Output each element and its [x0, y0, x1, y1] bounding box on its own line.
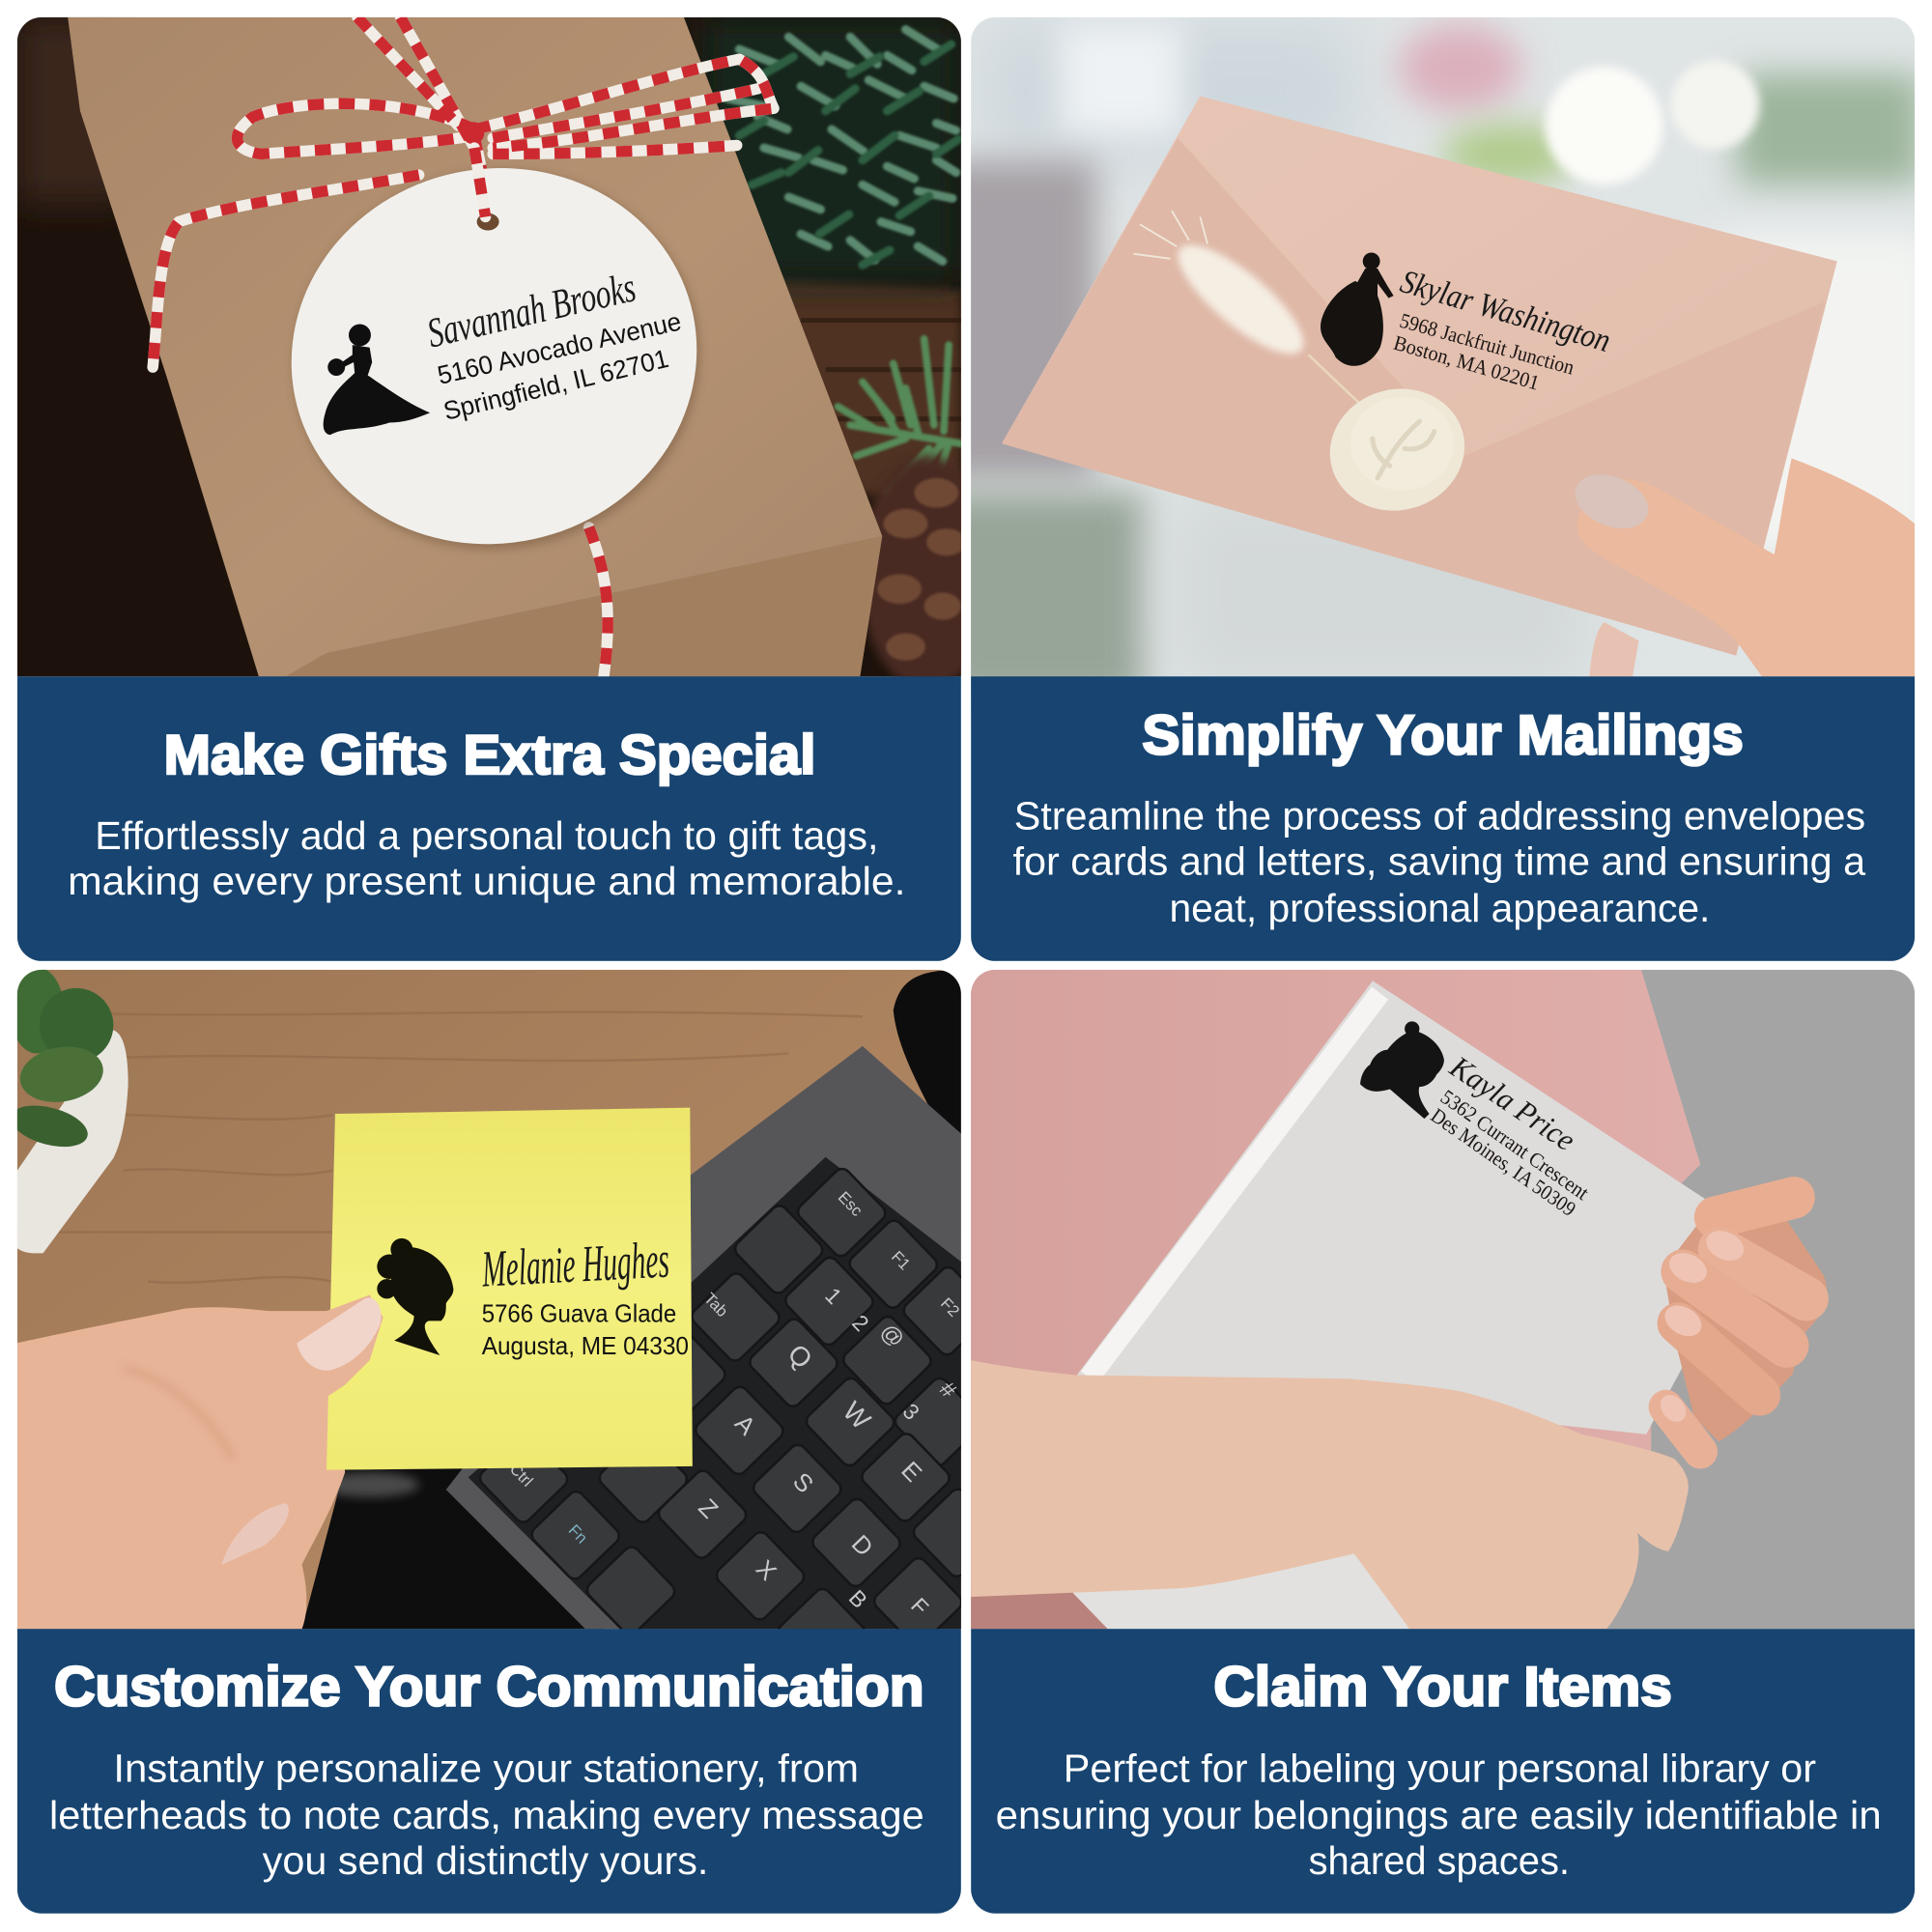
twine — [153, 17, 774, 676]
photo: wrapped gift with round tag — [17, 17, 993, 690]
keyboard keys — [476, 1165, 1005, 1680]
keyboard keys: Q — [782, 1338, 818, 1375]
body text: neat, professional appearance. — [1169, 886, 1710, 930]
body text — [49, 1746, 924, 1883]
icon: woman profile with flowing hair — [1360, 1021, 1444, 1119]
photo: pink envelope with wax seal — [936, 17, 1932, 702]
address text on book: Des Moines, IA 50309 — [1427, 1104, 1580, 1221]
keyboard keys: D — [846, 1530, 878, 1562]
panel: make gifts extra special — [17, 17, 993, 961]
keyboard keys: # — [935, 1377, 961, 1403]
arm and hand — [971, 1360, 1689, 1629]
laptop body — [446, 1046, 961, 1629]
photo: sticky note over laptop keyboard — [17, 970, 961, 1629]
address text on tag: 5160 Avocado Avenue — [435, 306, 684, 390]
body text: Streamline the process of addressing envelopes — [1014, 793, 1865, 838]
plant pot — [17, 1030, 128, 1253]
body text — [996, 1746, 1882, 1883]
address text on envelope: 5968 Jackfruit Junction — [1397, 309, 1577, 380]
address text on note — [480, 1231, 689, 1360]
keyboard keys: Ctrl — [506, 1460, 536, 1491]
keyboard keys: Z — [693, 1494, 723, 1523]
pinecone — [867, 449, 961, 680]
keyboard keys: @ — [876, 1319, 910, 1352]
keyboard keys: Esc — [835, 1188, 867, 1220]
address text on envelope: Skylar Washington — [1396, 263, 1615, 359]
address text on envelope — [1393, 272, 1609, 390]
fingers — [1665, 1198, 1806, 1452]
hand holding envelope — [1567, 458, 1915, 676]
heading: Make Gifts Extra Special — [164, 724, 815, 786]
thumb over note — [124, 1295, 384, 1565]
body text: for cards and letters, saving time and ensuring a — [1012, 839, 1865, 884]
round gift tag — [291, 142, 702, 553]
body text: you send distinctly yours. — [263, 1838, 708, 1883]
keyboard well — [469, 1157, 961, 1629]
black object corner — [894, 970, 961, 1133]
keyboard keys: 1 — [820, 1283, 847, 1309]
back of right hand — [1663, 1182, 1827, 1441]
kraft gift box — [68, 17, 882, 676]
caption background — [17, 676, 961, 961]
body text: letterheads to note cards, making every message — [49, 1793, 924, 1837]
caption background — [17, 1629, 961, 1914]
keyboard keys: F2 — [937, 1294, 963, 1321]
book spine highlight — [1090, 993, 1380, 1378]
panel: simplify your mailings — [936, 17, 1932, 961]
box lower fold — [286, 536, 882, 676]
keyboard keys: 2 — [847, 1310, 874, 1336]
keyboard keys: W — [838, 1396, 877, 1435]
yellow sticky note — [327, 1108, 693, 1470]
keyboard keys: S — [787, 1467, 818, 1498]
heading: Simplify Your Mailings — [1142, 705, 1744, 767]
address text on book — [1427, 1049, 1593, 1221]
panel: claim your items — [971, 970, 1915, 1914]
address text on note: Melanie Hughes — [480, 1231, 670, 1298]
wax seal — [1329, 388, 1464, 511]
caption background — [971, 1629, 1915, 1914]
wood grain — [17, 1010, 863, 1283]
body text: making every present unique and memorable. — [68, 859, 906, 903]
address text on note: Augusta, ME 04330 — [482, 1333, 689, 1360]
pine branch lower right — [838, 339, 961, 493]
blurred background — [936, 25, 1932, 702]
icon: princess silhouette with gown — [324, 324, 430, 435]
address text on envelope: Boston, MA 02201 — [1391, 331, 1542, 395]
address text on note: 5766 Guava Glade — [482, 1301, 676, 1328]
body text — [1012, 793, 1865, 930]
pink shirt — [971, 970, 1700, 1589]
address text on book: 5362 Currant Crescent — [1436, 1085, 1593, 1205]
hand behind note — [17, 1307, 345, 1629]
envelope lower pocket — [1002, 138, 1739, 655]
keyboard keys: E — [895, 1457, 926, 1488]
heading: Customize Your Communication — [54, 1656, 924, 1718]
photo: hands holding white book — [971, 970, 1915, 1629]
keyboard keys: B — [844, 1585, 872, 1613]
body text: Instantly personalize your stationery, from — [113, 1746, 859, 1790]
address text on book: Kayla Price — [1443, 1049, 1581, 1157]
book lower section — [1070, 1551, 1409, 1629]
keyboard keys: A — [729, 1409, 760, 1440]
address text on tag: Savannah Brooks — [423, 264, 639, 356]
keyboard keys: Fn — [565, 1520, 591, 1548]
keyboard keys: F — [906, 1593, 933, 1620]
body text: shared spaces. — [1309, 1838, 1570, 1883]
keyboard keys: X — [751, 1555, 781, 1586]
body text — [68, 813, 905, 903]
body text: ensuring your belongings are easily identifiable in — [996, 1793, 1882, 1837]
envelope — [1002, 96, 1837, 656]
feather — [1133, 211, 1360, 404]
fingernails — [1656, 1225, 1748, 1427]
pine branches top right — [702, 17, 961, 282]
heading: Claim Your Items — [1213, 1656, 1672, 1718]
white book — [1077, 980, 1756, 1435]
body text: Perfect for labeling your personal library or — [1064, 1746, 1816, 1790]
panel: customize your communication — [7, 967, 1005, 1914]
caption background — [971, 676, 1915, 961]
keyboard keys: 3 — [897, 1399, 924, 1425]
icon: ball gown silhouette — [1321, 252, 1394, 366]
icon: woman head silhouette — [377, 1238, 453, 1355]
body text: Effortlessly add a personal touch to gift tags, — [95, 813, 878, 858]
keyboard keys: F1 — [888, 1247, 914, 1273]
succulent leaves — [17, 970, 114, 1148]
keyboard keys: Tab — [700, 1290, 731, 1321]
address text on tag — [429, 275, 680, 421]
laptop shadow area — [301, 1466, 604, 1629]
address text on tag: Springfield, IL 62701 — [440, 344, 671, 426]
